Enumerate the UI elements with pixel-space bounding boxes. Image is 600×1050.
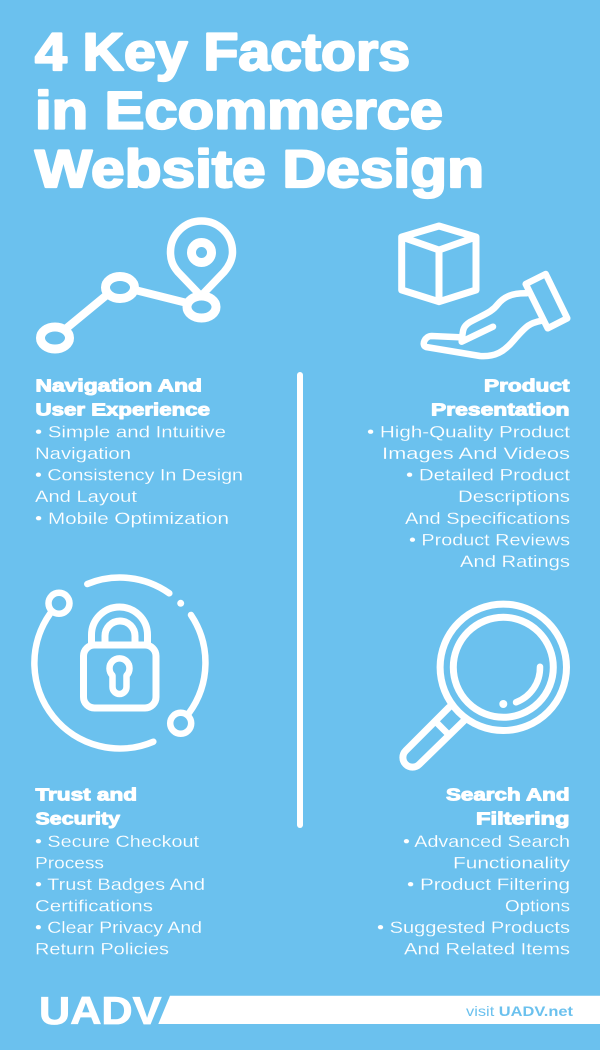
- heading: Presentation: [431, 400, 570, 420]
- panel: search and filtering: [377, 604, 571, 958]
- bullet list: • Trust Badges And: [35, 875, 205, 894]
- panel: navigation and user experience: [35, 221, 243, 528]
- bullet list: And Related Items: [404, 940, 570, 958]
- bullet list: [377, 832, 571, 958]
- heading: Trust and: [36, 784, 137, 804]
- bullet list: [35, 422, 243, 528]
- panel: product presentation: [367, 226, 570, 571]
- bullet list: • Product Filtering: [407, 875, 570, 894]
- heading: Product: [484, 376, 570, 396]
- bullet list: [367, 422, 570, 571]
- bullet list: • Detailed Product: [406, 466, 570, 484]
- bullet list: • Consistency In Design: [35, 466, 243, 484]
- bullet list: Functionality: [453, 854, 571, 872]
- bullet list: • High-Quality Product: [367, 422, 570, 442]
- bullet list: Options: [505, 896, 570, 916]
- heading: Security: [36, 808, 120, 828]
- logo: UADV: UADV: [39, 990, 162, 1033]
- title: [35, 23, 484, 199]
- bullet list: Navigation: [35, 444, 131, 463]
- title: 4 Key Factors: [35, 23, 410, 82]
- bullet list: Descriptions: [458, 487, 570, 506]
- title: Website Design: [35, 140, 484, 199]
- heading: [36, 784, 137, 828]
- center divider: [297, 372, 303, 828]
- heading: [446, 784, 570, 828]
- bullet list: • Clear Privacy And: [35, 918, 202, 937]
- footer: [39, 990, 600, 1033]
- bullet list: Process: [35, 854, 104, 872]
- icon: box above open hand: [402, 226, 567, 356]
- heading: Navigation And: [36, 376, 202, 396]
- heading: Filtering: [476, 808, 570, 828]
- footer bar: [158, 996, 600, 1024]
- bullet list: And Layout: [35, 487, 137, 506]
- bullet list: And Ratings: [460, 552, 570, 571]
- heading: [431, 376, 570, 420]
- bullet list: Certifications: [35, 896, 153, 916]
- panel: trust and security: [34, 578, 205, 958]
- icon: padlock in ring: [34, 578, 205, 749]
- title: in Ecommerce: [35, 82, 443, 140]
- bullet list: • Mobile Optimization: [35, 509, 229, 528]
- bullet list: • Advanced Search: [403, 832, 570, 851]
- bullet list: Return Policies: [35, 940, 169, 958]
- website link: visit UADV.net: [466, 1003, 573, 1019]
- heading: [36, 376, 210, 420]
- bullet list: • Simple and Intuitive: [35, 422, 226, 442]
- icon: route with map pin: [40, 221, 232, 349]
- bullet list: • Suggested Products: [377, 918, 570, 937]
- bullet list: And Specifications: [405, 509, 570, 528]
- bullet list: • Product Reviews: [409, 530, 570, 550]
- heading: Search And: [446, 784, 570, 804]
- bullet list: • Secure Checkout: [35, 832, 199, 851]
- heading: User Experience: [36, 400, 210, 420]
- bullet list: [35, 832, 205, 958]
- bullet list: Images And Videos: [382, 444, 570, 463]
- icon: magnifying glass: [403, 604, 566, 767]
